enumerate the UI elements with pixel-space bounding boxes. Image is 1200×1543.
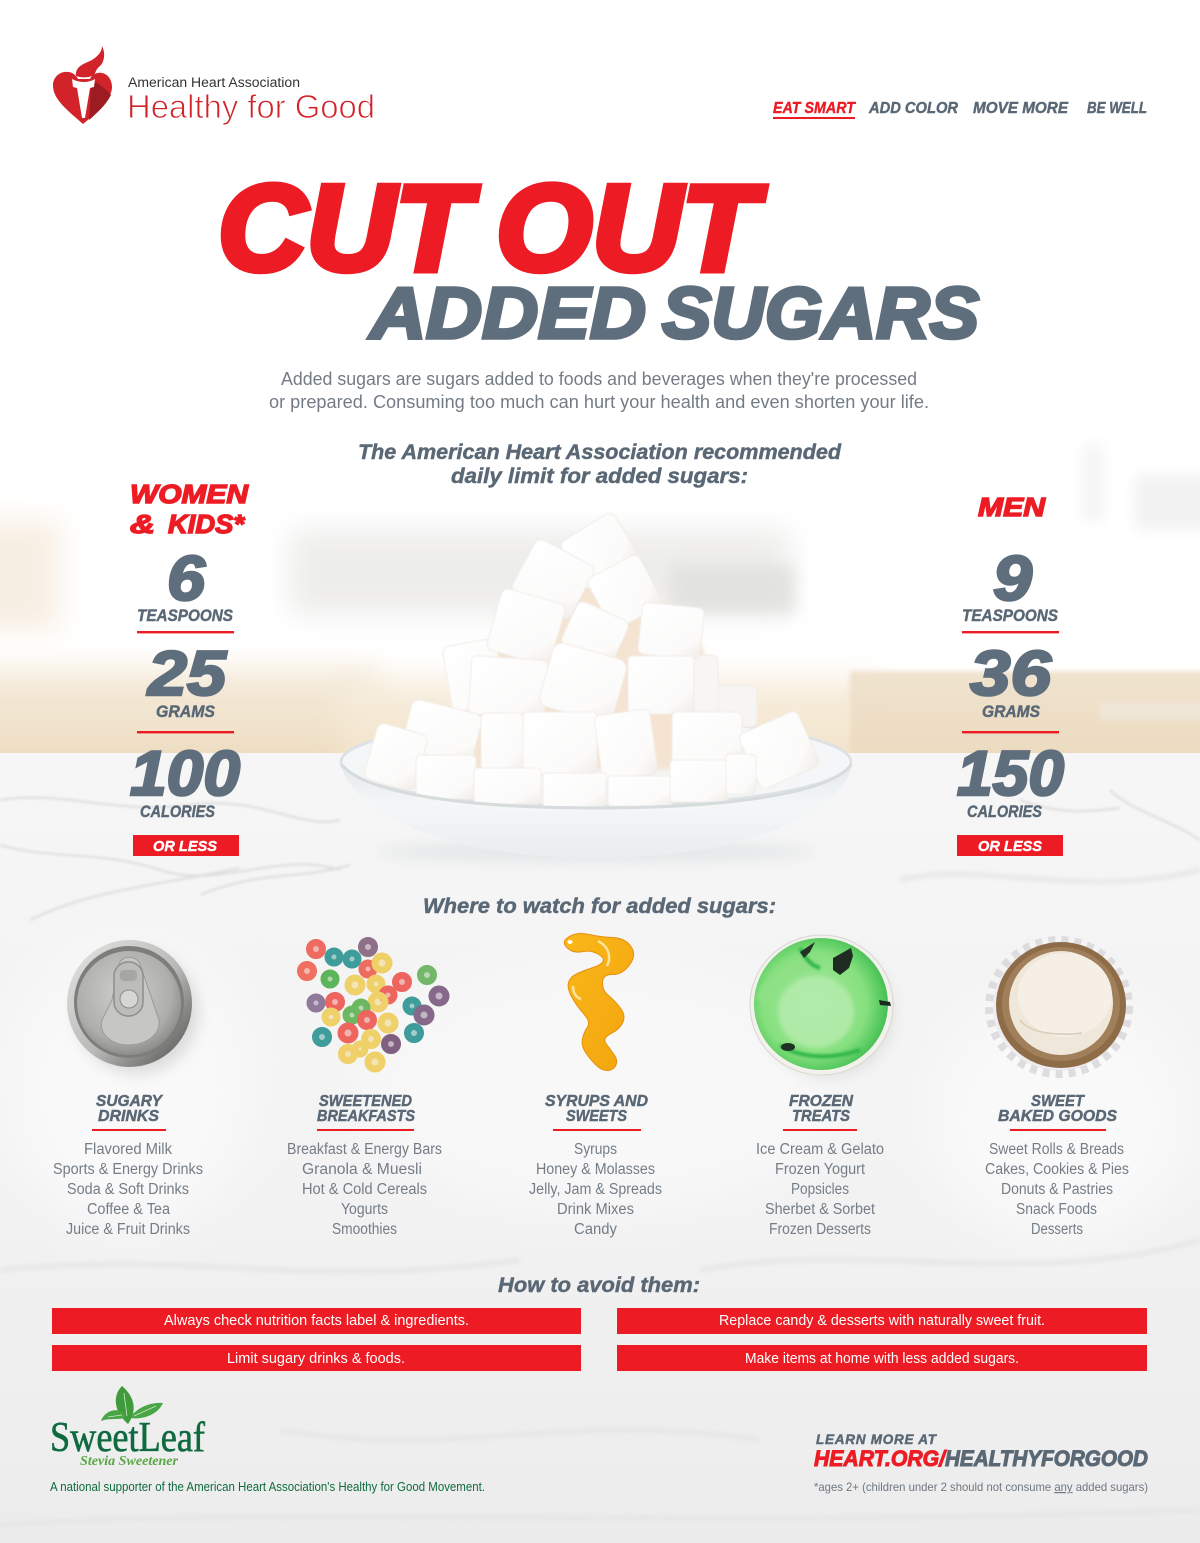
heading: sugary drinks: SUGARY [96,1093,164,1110]
link: heart.org: HEART.ORG/ [814,1446,948,1471]
wordmark: Healthy for Good: Healthy for Good [127,88,375,125]
list: sweet baked goods: Sweet Rolls & Breads [989,1141,1124,1158]
call to action: learn more [814,1432,1148,1471]
logo: SweetLeaf [50,1386,205,1468]
heading: men: MEN [978,492,1046,522]
heading: where to watch: Where to watch for added sugars: [423,895,776,918]
panel: syrups and sweets [529,934,662,1238]
stat: 9 teaspoons: TEASPOONS [962,607,1058,625]
list: sugary drinks [53,1141,203,1238]
illustration: plate of sugar cubes [341,511,851,862]
footnote: *ages 2+ (children under 2 should not consume any added sugars) [814,1480,1148,1494]
title: CUT [218,160,480,296]
subtitle: added sugars: SUGARS [662,274,979,354]
list: sugary drinks: Juice & Fruit Drinks [66,1221,190,1238]
icon: frosted cupcake [989,940,1129,1074]
stat: 6 teaspoons: TEASPOONS [137,607,233,625]
stat: 25 grams [137,639,234,733]
subtitle: added sugars: ADDED [368,274,646,354]
list: frozen treats: Sherbet & Sorbet [765,1201,876,1218]
list: syrups and sweets: Drink Mixes [557,1201,634,1218]
nav: Be Well: BE WELL [1087,100,1147,117]
tip: limit sugary drinks [52,1345,581,1371]
panel: frozen treats [750,935,894,1238]
heading: frozen treats: FROZEN [789,1093,854,1110]
heading: recommended daily limit: daily limit for added sugars: [451,465,748,488]
list: frozen treats: Frozen Yogurt [775,1161,866,1178]
tip: replace candy with fruit: Replace candy & desserts with naturally sweet fruit. [719,1312,1045,1329]
list: sweet baked goods [985,1141,1129,1238]
background: blurred kitchen [0,0,1200,798]
supporter note: A national supporter of the American Heart Association's Healthy for Good Movement. [50,1479,485,1494]
panel: women and kids limits [130,479,249,856]
heading: frozen treats: TREATS [792,1108,851,1125]
panel: men limits [957,492,1064,856]
badge: or less [133,835,239,856]
badge: or less: OR LESS [153,838,217,855]
stat: 9 teaspoons: 9 [993,544,1032,614]
list: frozen treats: Popsicles [791,1181,849,1198]
stat: 6 teaspoons: 6 [167,544,206,614]
list: frozen treats: Ice Cream & Gelato [756,1141,884,1158]
stat: 36 grams: 36 [970,639,1052,709]
badge: or less: OR LESS [978,838,1042,855]
title [218,160,979,354]
stat: 25 grams: 25 [147,639,227,709]
heading: sweet baked goods: SWEET [1031,1093,1085,1110]
stat: 6 teaspoons [137,544,234,633]
list: sweetened breakfasts [287,1141,442,1238]
tagline: stevia sweetener: Stevia Sweetener [80,1453,179,1468]
plate rim [342,765,851,808]
nav: Move More: MOVE MORE [973,100,1069,117]
heading: women and kids: KIDS* [168,509,246,539]
icon: fruit cereal rings [300,940,446,1069]
warm shadow behind cubes [460,580,740,770]
call to action: learn more: LEARN MORE AT [816,1432,938,1447]
stat: 36 grams [962,639,1059,733]
stat: 100 calories: CALORIES [140,803,215,821]
heading: how to avoid them: How to avoid them: [498,1274,700,1297]
tip: make items at home [617,1345,1147,1371]
title: OUT [496,160,767,296]
nav: Add Color: ADD COLOR [868,100,958,117]
list: sweet baked goods: Donuts & Pastries [1001,1181,1113,1198]
subtitle: added sugars [368,274,979,354]
panel: sweet baked goods [985,940,1129,1238]
heading: sugary drinks: DRINKS [98,1108,160,1125]
heading: sweetened breakfasts: BREAKFASTS [317,1108,416,1125]
list: syrups and sweets [529,1141,662,1238]
heading: recommended daily limit: The American Heart Association recommended [358,441,842,464]
list: sweetened breakfasts: Breakfast & Energy Bars [287,1141,442,1158]
icon: heart and torch [53,46,112,124]
background: marble counter [0,753,1200,1543]
intro paragraph [269,369,929,412]
stat: 100 calories: 100 [130,739,240,809]
list: sweetened breakfasts: Granola & Muesli [302,1161,422,1178]
panel: sweetened breakfasts [287,940,446,1238]
list: sugary drinks: Coffee & Tea [87,1201,170,1218]
list: sugary drinks: Flavored Milk [84,1141,172,1158]
heading: sweet baked goods [998,1093,1118,1131]
wordmark: SweetLeaf: SweetLeaf [50,1415,205,1461]
tip: make items at home: Make items at home with less added sugars. [745,1350,1019,1367]
list: frozen treats: Frozen Desserts [769,1221,871,1238]
heading: sweetened breakfasts: SWEETENED [319,1093,412,1110]
heading: women and kids: WOMEN [130,479,249,509]
list: sweet baked goods: Snack Foods [1016,1201,1097,1218]
heading: women and kids: & [130,509,155,539]
panel: sugary drinks [53,940,203,1238]
list: sweetened breakfasts: Smoothies [332,1221,397,1238]
list: syrups and sweets: Candy [574,1221,617,1238]
sugar cubes [363,511,820,807]
tip: check nutrition label: Always check nutrition facts label & ingredients. [164,1312,469,1329]
heading: syrups and sweets: SWEETS [566,1108,628,1125]
tip: limit sugary drinks: Limit sugary drinks & foods. [227,1350,405,1367]
heading: sweet baked goods: BAKED GOODS [998,1108,1118,1125]
nav: Eat Smart active: EAT SMART [773,100,856,117]
wordmark: American Heart Association: American Heart Association [128,75,300,90]
stat: 150 calories: CALORIES [967,803,1042,821]
icon: soda can [67,940,199,1074]
logo: American Heart Association Healthy for Good [53,46,375,125]
heading: frozen treats [783,1093,857,1131]
icon: mint chip ice cream [750,935,894,1078]
plate shadow [376,842,816,862]
stat: 150 calories: 150 [957,739,1064,809]
list: sugary drinks: Soda & Soft Drinks [67,1181,189,1198]
heading: recommended daily limit [358,441,842,488]
icon: syrup swirl [564,934,634,1071]
stat: 25 grams: GRAMS [156,703,215,721]
list: syrups and sweets: Syrups [574,1141,617,1158]
intro paragraph: or prepared. Consuming too much can hurt your health and even shorten your life. [269,392,929,412]
list: frozen treats [756,1141,884,1238]
plate back [341,718,851,806]
plate bowl [342,768,851,858]
stat: 9 teaspoons [962,544,1059,633]
icon: stevia leaves [101,1386,163,1424]
badge: or less [957,835,1063,856]
navigation [773,100,1147,119]
list: sweetened breakfasts: Hot & Cold Cereals [302,1181,427,1198]
tip: check nutrition label [52,1308,581,1334]
stat: 36 grams: GRAMS [982,703,1040,721]
tip: replace candy with fruit [617,1308,1147,1334]
list: syrups and sweets: Jelly, Jam & Spreads [529,1181,662,1198]
heading: sugary drinks [92,1093,166,1131]
intro paragraph: Added sugars are sugars added to foods and beverages when they're processed [281,369,917,389]
heading: sweetened breakfasts [317,1093,416,1131]
list: sweet baked goods: Cakes, Cookies & Pies [985,1161,1129,1178]
list: sugary drinks: Sports & Energy Drinks [53,1161,203,1178]
link: healthyforgood: HEALTHYFORGOOD [945,1446,1148,1471]
list: sweetened breakfasts: Yogurts [341,1201,388,1218]
list: sweet baked goods: Desserts [1031,1221,1083,1238]
heading: syrups and sweets: SYRUPS AND [545,1093,648,1110]
heading: women and kids [130,479,249,539]
list: syrups and sweets: Honey & Molasses [536,1161,655,1178]
heading: syrups and sweets [545,1093,648,1131]
